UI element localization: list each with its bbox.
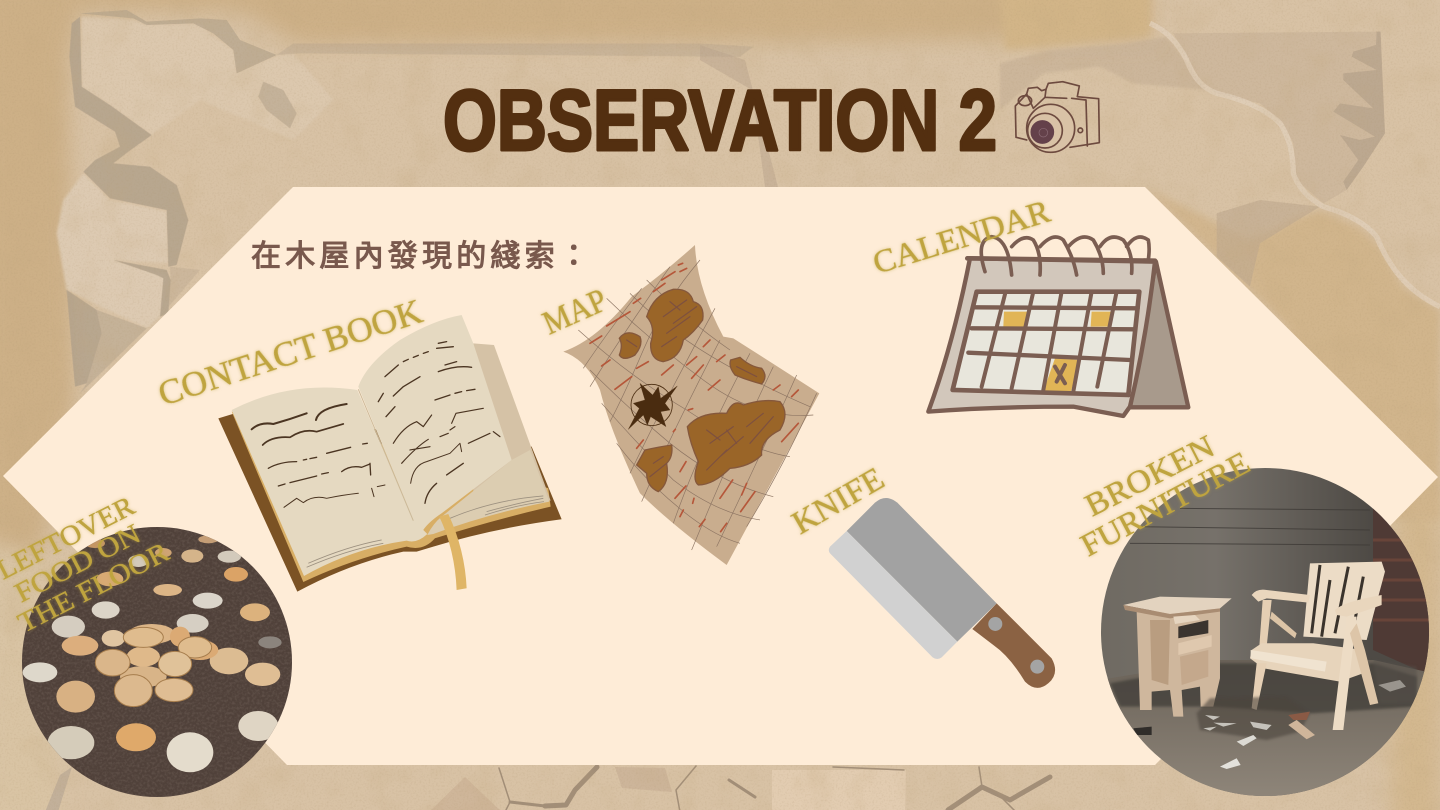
icon: camera bbox=[1015, 82, 1099, 152]
label: calendar: CALENDAR bbox=[869, 194, 1054, 282]
front sheet bbox=[928, 258, 1155, 416]
bottom strip with cracks bbox=[772, 770, 906, 810]
stand back bbox=[1130, 262, 1188, 407]
left page bbox=[232, 387, 427, 576]
title: OBSERVATION 2 bbox=[443, 73, 997, 169]
floor bbox=[1100, 660, 1433, 800]
label: broken furniture: FURNITURE bbox=[1074, 444, 1256, 563]
map land and bands, right bbox=[1000, 23, 1440, 307]
debris bbox=[1133, 660, 1417, 769]
lower right pages bbox=[427, 450, 549, 535]
grid lines bbox=[578, 260, 817, 550]
photo: leftover food on the floor bbox=[20, 525, 295, 800]
label: broken furniture: BROKEN bbox=[1079, 428, 1220, 523]
blade edge bbox=[829, 531, 957, 659]
book cover bbox=[218, 414, 562, 592]
right page bbox=[358, 315, 512, 533]
illustration: open book bbox=[218, 315, 562, 592]
wooden chair bbox=[1250, 562, 1385, 730]
label: leftover food on the floor bbox=[0, 490, 174, 639]
brick wall bbox=[1373, 508, 1429, 672]
blade bbox=[847, 498, 997, 642]
photo: broken furniture bbox=[1100, 465, 1440, 800]
map land and bands, left bbox=[57, 10, 753, 393]
illustration: treasure map bbox=[563, 245, 819, 565]
map bands, center bbox=[700, 45, 778, 187]
handwriting bbox=[252, 342, 500, 507]
illustration: cleaver knife bbox=[829, 498, 1055, 688]
label: leftover food on the floor: THE FLOOR bbox=[13, 537, 174, 639]
date grid bbox=[953, 292, 1139, 395]
label: leftover food on the floor: FOOD ON bbox=[10, 518, 146, 609]
binder rings bbox=[981, 237, 1149, 275]
label: knife: KNIFE bbox=[786, 461, 891, 542]
intro text: 在木屋內發現的綫索： bbox=[251, 240, 593, 273]
label: contact book: CONTACT BOOK bbox=[153, 292, 427, 414]
illustration: desk calendar bbox=[928, 237, 1188, 416]
land masses bbox=[619, 289, 785, 492]
red marks bbox=[590, 263, 798, 532]
handle bbox=[972, 603, 1055, 688]
parchment bbox=[563, 245, 819, 565]
page edge gold bbox=[232, 412, 551, 582]
rivets bbox=[988, 617, 1002, 631]
ribbon bbox=[439, 514, 467, 590]
label: map: MAP bbox=[537, 282, 613, 342]
compass bbox=[628, 383, 677, 429]
wall planks bbox=[1130, 508, 1370, 545]
back page bbox=[473, 343, 551, 501]
panel: main cream hexagon bbox=[3, 187, 1438, 765]
side table bbox=[1123, 597, 1232, 717]
